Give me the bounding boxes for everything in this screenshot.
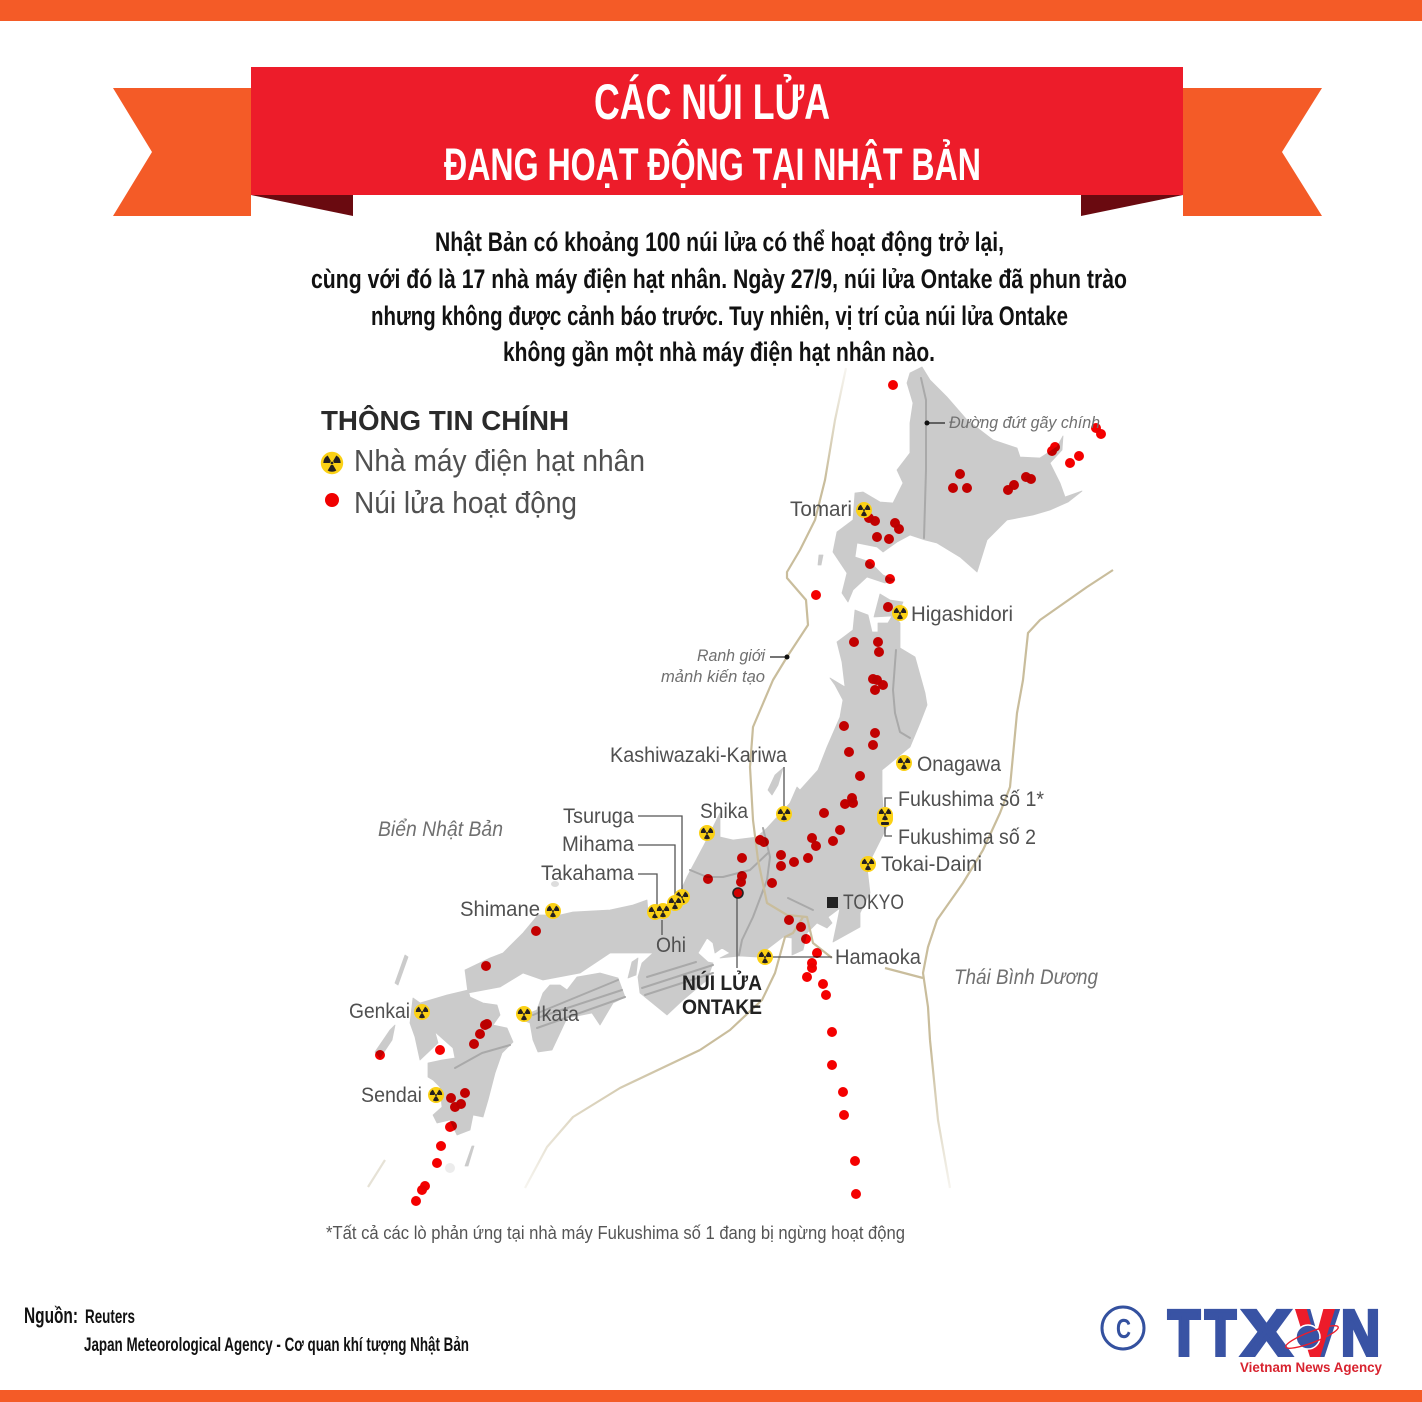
plant and place labels: Genkai [349, 1000, 410, 1023]
copyright mark [1102, 1307, 1144, 1349]
sea and annotation labels: Đường đứt gãy chính [949, 413, 1100, 432]
logo letters: X [1242, 1297, 1291, 1369]
intro text: cùng với đó là 17 nhà máy điện hạt nhân. Ngày 27/9, núi lửa Ontake đã phun trào [311, 264, 1127, 294]
legend [321, 404, 645, 520]
Honshu [465, 594, 927, 1015]
logo letter V: V [1300, 1297, 1338, 1369]
map of Japan [368, 367, 1113, 1188]
legend icon: volcano [325, 493, 339, 507]
ribbon fold right [1081, 195, 1183, 216]
plant and place labels: Higashidori [911, 603, 1013, 626]
logo TTXVN [1168, 1297, 1382, 1375]
logo globe [1296, 1325, 1320, 1349]
sea and annotation labels: Ranh giới [697, 646, 766, 665]
nuclear plant icons [414, 502, 912, 1103]
sea and annotation labels: Thái Bình Dương [954, 966, 1098, 989]
plant and place labels: Kashiwazaki-Kariwa [610, 744, 787, 767]
logo letters: N [1341, 1297, 1380, 1369]
plant and place labels: Ikata [536, 1003, 579, 1026]
small islands [375, 555, 823, 1173]
Tokyo marker [827, 897, 838, 908]
plant and place labels: Tomari [790, 498, 852, 521]
plant and place labels: Mihama [562, 833, 634, 856]
plant and place labels: Ohi [656, 934, 686, 957]
callout anchor dots [784, 420, 930, 660]
logo letters [1168, 1297, 1380, 1369]
plant and place labels: Tokai-Daini [881, 853, 982, 876]
plant and place labels: Hamaoka [835, 946, 921, 969]
plant and place labels: Onagawa [917, 753, 1001, 776]
title line 2: ĐANG HOẠT ĐỘNG TẠI NHẬT BẢN [444, 139, 981, 190]
Ontake volcano marker [733, 888, 743, 898]
plant and place labels: TOKYO [843, 891, 904, 914]
volcano dots [375, 380, 1106, 1206]
sources: Reuters [85, 1307, 135, 1328]
legend text: volcano: Núi lửa hoạt động [354, 485, 577, 520]
sources: Nguồn: [24, 1303, 78, 1328]
intro text: không gần một nhà máy điện hạt nhân nào. [503, 337, 935, 367]
logo letters: T [1168, 1297, 1200, 1369]
plant and place labels [349, 498, 1044, 1107]
footnote: *Tất cả các lò phản ứng tại nhà máy Fukushima số 1 đang bị ngừng hoạt động [326, 1223, 905, 1243]
plant and place labels: Shimane [460, 898, 540, 921]
ribbon fold left [251, 195, 353, 216]
legend text: nuclear plant: Nhà máy điện hạt nhân [354, 443, 645, 478]
title line 1: CÁC NÚI LỬA [594, 73, 830, 130]
Ontake volcano label: NÚI LỬA [682, 971, 762, 995]
ribbon main [251, 67, 1183, 195]
top orange bar [0, 0, 1422, 21]
plant and place labels: Sendai [361, 1084, 422, 1107]
logo tagline: Vietnam News Agency [1240, 1359, 1382, 1375]
plant and place labels: Fukushima số 2 [898, 826, 1036, 849]
ribbon tail right [1183, 88, 1322, 216]
Shikoku [518, 973, 625, 1052]
plant and place labels: Takahama [541, 862, 634, 885]
Ontake volcano label [682, 971, 762, 1019]
logo letters: T [1205, 1297, 1236, 1369]
copyright mark: C [1116, 1313, 1131, 1344]
logo orbit [1284, 1322, 1340, 1352]
plant and place labels: Fukushima số 1* [898, 788, 1044, 811]
sources [24, 1303, 469, 1356]
legend icon: nuclear plant [321, 452, 343, 474]
sea and annotation labels [378, 413, 1100, 989]
ribbon tail left [113, 88, 251, 216]
tectonic plate boundaries [368, 368, 1113, 1188]
intro text: Nhật Bản có khoảng 100 núi lửa có thể hoạt động trở lại, [435, 227, 1004, 257]
title ribbon [113, 67, 1322, 216]
Kyushu [410, 990, 513, 1135]
bottom orange bar [0, 1390, 1422, 1402]
sea and annotation labels: mảnh kiến tạo [661, 667, 765, 686]
plant and place labels: Shika [700, 800, 748, 823]
leader lines [638, 423, 945, 968]
intro text: nhưng không được cảnh báo trước. Tuy nhiên, vị trí của núi lửa Ontake [371, 301, 1068, 331]
Hokkaido [833, 367, 1082, 602]
legend heading: THÔNG TIN CHÍNH [321, 404, 569, 436]
fault lines [455, 378, 926, 1068]
Fukushima plants icon [877, 807, 893, 827]
Ontake volcano label: ONTAKE [682, 996, 762, 1019]
sources: Japan Meteorological Agency - Cơ quan khí tượng Nhật Bản [84, 1335, 469, 1356]
plant and place labels: Tsuruga [563, 805, 634, 828]
logo letter V: V [1297, 1297, 1333, 1369]
intro text [311, 227, 1127, 367]
sea and annotation labels: Biển Nhật Bản [378, 818, 503, 841]
